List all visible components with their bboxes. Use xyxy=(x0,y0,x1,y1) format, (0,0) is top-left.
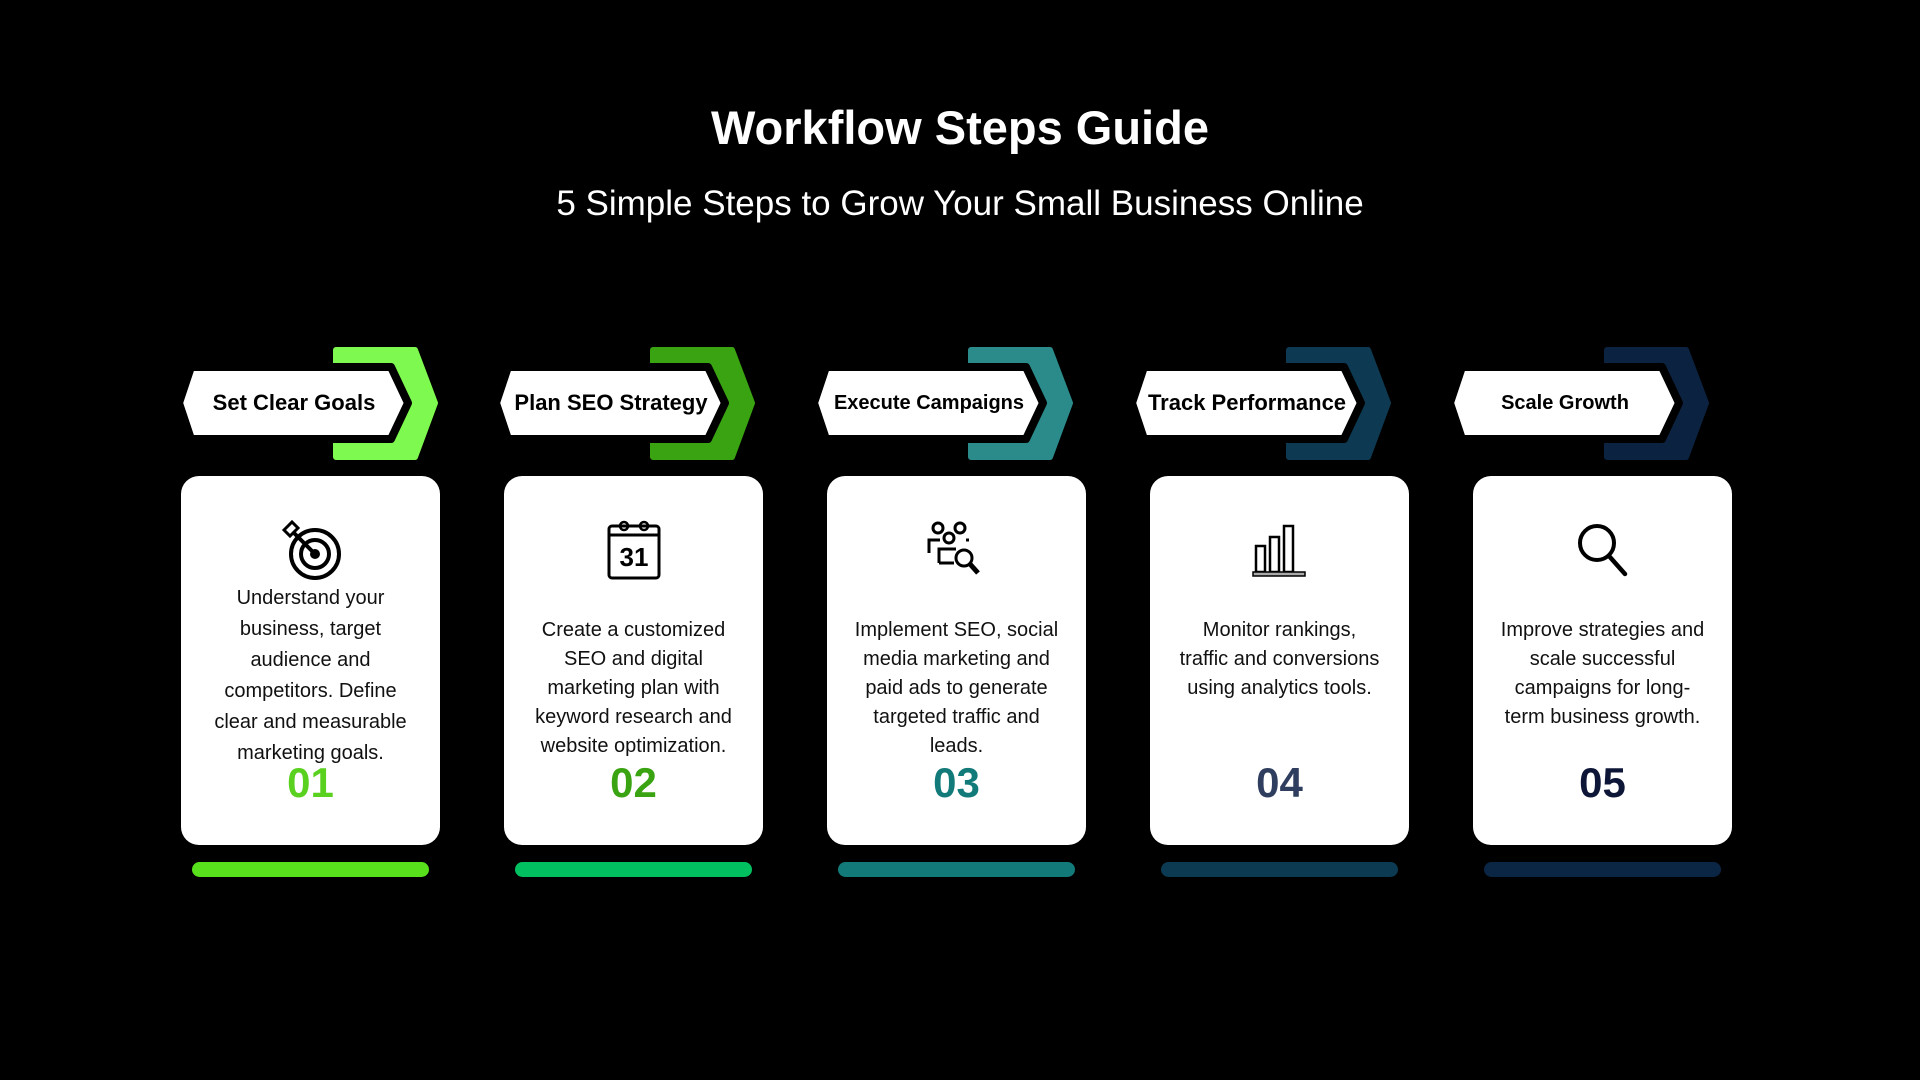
text: business, target xyxy=(240,618,381,640)
icon: bar chart xyxy=(1252,524,1306,577)
header: step 4 xyxy=(1136,347,1391,460)
text: marketing plan with xyxy=(547,677,720,699)
text xyxy=(1501,619,1704,728)
bar: step 5 xyxy=(1484,862,1721,877)
text xyxy=(855,619,1058,757)
number: 03 xyxy=(933,759,980,806)
text: keyword research and xyxy=(535,706,732,728)
icon: calendar: 31 xyxy=(620,542,648,572)
header: step 3 xyxy=(818,347,1073,460)
icon: target xyxy=(282,520,341,580)
bar: step 3 xyxy=(838,862,1075,877)
number: 04 xyxy=(1256,759,1303,806)
title: Workflow Steps Guide xyxy=(711,101,1209,154)
text: Implement SEO, social xyxy=(855,619,1058,641)
text: traffic and conversions xyxy=(1180,648,1379,670)
text: campaigns for long- xyxy=(1515,677,1690,699)
card: step 2 xyxy=(504,476,763,845)
text: Improve strategies and xyxy=(1501,619,1704,641)
text: scale successful xyxy=(1530,648,1675,670)
card: step 4 xyxy=(1150,476,1409,845)
text xyxy=(1180,619,1379,699)
text: Monitor rankings, xyxy=(1203,619,1356,641)
header: step 5 xyxy=(1454,347,1709,460)
card: step 5 xyxy=(1473,476,1732,845)
header: step 1: Set Clear Goals xyxy=(213,390,375,415)
text: Understand your xyxy=(237,587,384,609)
header: step 3: Execute Campaigns xyxy=(834,392,1024,414)
icon: people search xyxy=(928,522,980,575)
text: website optimization. xyxy=(541,735,726,757)
text: paid ads to generate xyxy=(865,677,1048,699)
text xyxy=(535,619,732,757)
subtitle: 5 Simple Steps to Grow Your Small Business Online xyxy=(556,184,1364,223)
bar: step 4 xyxy=(1161,862,1398,877)
card: step 3 xyxy=(827,476,1086,845)
text: clear and measurable xyxy=(214,711,407,733)
text: SEO and digital xyxy=(564,648,703,670)
text: media marketing and xyxy=(863,648,1050,670)
text: term business growth. xyxy=(1505,706,1700,728)
header: step 4: Track Performance xyxy=(1148,390,1346,415)
text: Create a customized xyxy=(542,619,725,641)
header: step 1 xyxy=(183,347,438,460)
header: step 5: Scale Growth xyxy=(1501,392,1629,414)
text: competitors. Define xyxy=(224,680,397,702)
bar: step 1 xyxy=(192,862,429,877)
text: leads. xyxy=(930,735,983,757)
bar: step 2 xyxy=(515,862,752,877)
card: step 1 xyxy=(181,476,440,845)
header: step 2: Plan SEO Strategy xyxy=(514,390,708,415)
number: 02 xyxy=(610,759,657,806)
number: 05 xyxy=(1579,759,1626,806)
icon: calendar xyxy=(608,520,660,580)
header: step 2 xyxy=(500,347,755,460)
text: audience and xyxy=(250,649,371,671)
text: marketing goals. xyxy=(237,742,384,764)
text: targeted traffic and xyxy=(873,706,1040,728)
icon: magnifier xyxy=(1578,524,1628,576)
text: using analytics tools. xyxy=(1187,677,1372,699)
number: 01 xyxy=(287,759,334,806)
text xyxy=(214,587,407,764)
